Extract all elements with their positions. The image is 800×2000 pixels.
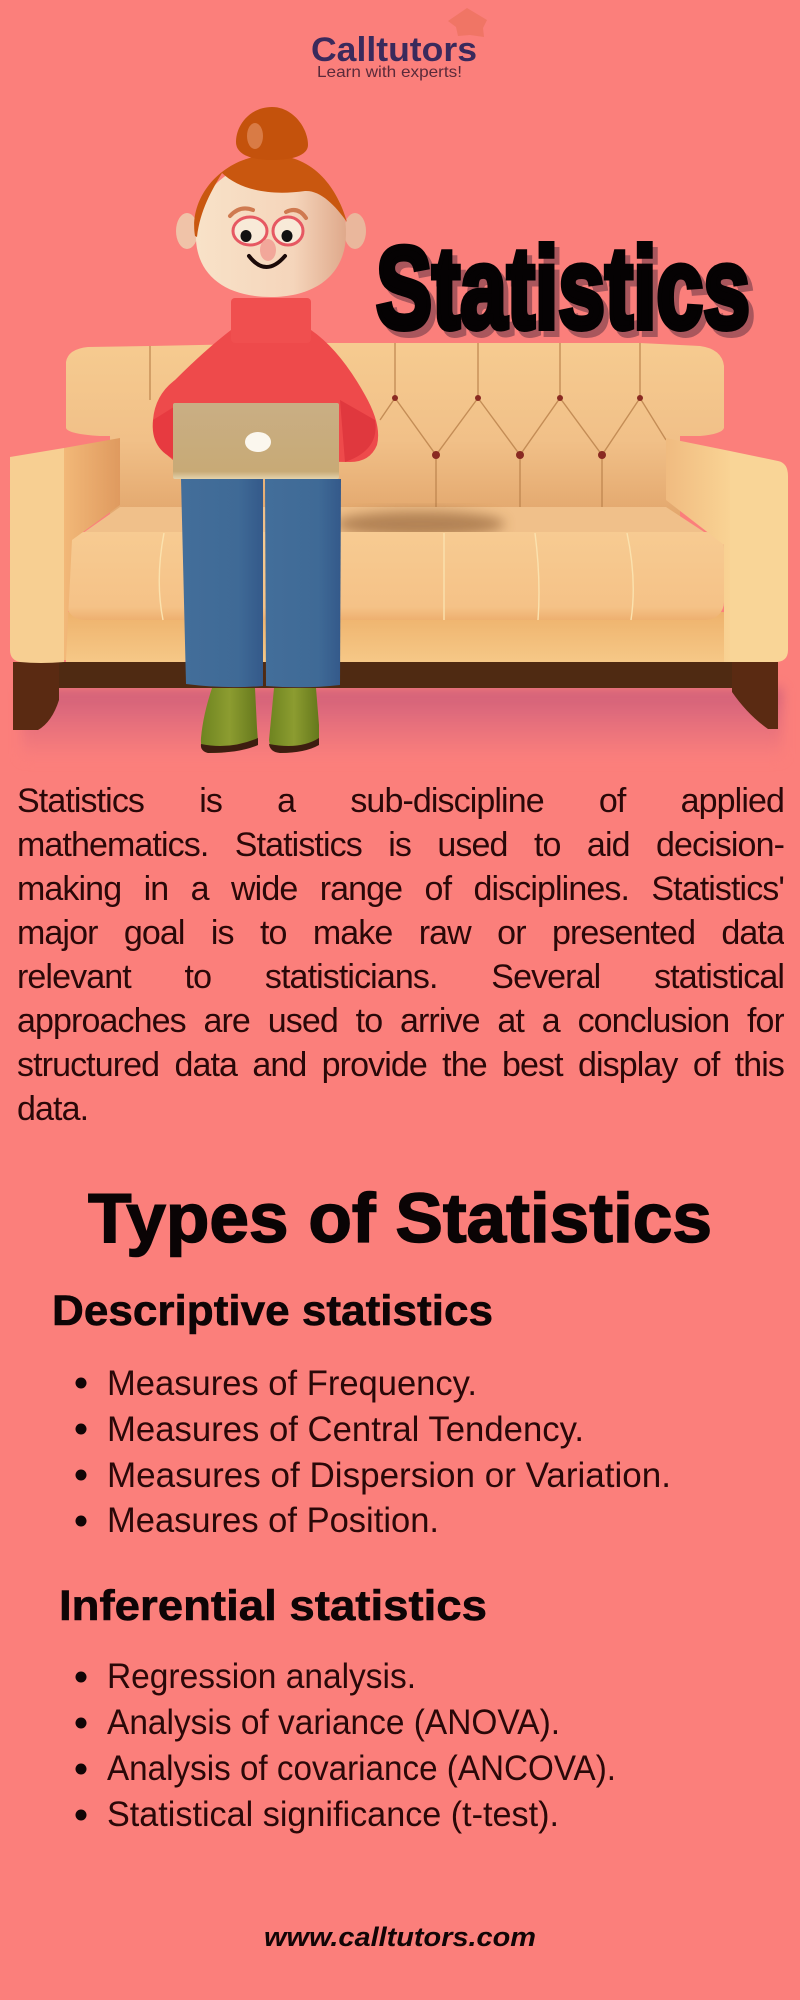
bullet list: Regression analysis. xyxy=(107,1657,416,1696)
icon: graduation cap xyxy=(448,8,487,37)
intro paragraph: major goal is to make raw or presented data xyxy=(17,914,784,952)
subheading: Inferential statistics xyxy=(59,1582,487,1630)
intro paragraph: data. xyxy=(17,1090,88,1128)
cushion seams xyxy=(159,533,633,620)
bullet list: Analysis of variance (ANOVA). xyxy=(107,1703,560,1742)
intro paragraph: Statistics is a sub-discipline of applied xyxy=(17,782,784,820)
footer URL: www.calltutors.com xyxy=(264,1922,536,1952)
ears xyxy=(176,213,198,249)
section: Inferential statistics xyxy=(59,1582,616,1834)
tufted buttons xyxy=(392,395,643,459)
logo tagline: Learn with experts! xyxy=(317,64,462,81)
intro paragraph xyxy=(17,782,784,1128)
jeans xyxy=(181,479,341,687)
subheading: Descriptive statistics xyxy=(52,1287,493,1335)
laptop logo dot xyxy=(245,432,271,452)
seat top xyxy=(66,507,724,570)
intro paragraph: relevant to statisticians. Several statistical xyxy=(17,958,784,996)
intro paragraph: approaches are used to arrive at a conclusion for xyxy=(17,1002,784,1040)
intro paragraph: structured data and provide the best display of this xyxy=(17,1046,784,1084)
laptop xyxy=(173,403,339,479)
logo wordmark: Calltutors xyxy=(311,31,477,69)
sofa back xyxy=(66,343,724,520)
left arm xyxy=(10,438,120,663)
floor shadow xyxy=(22,688,782,758)
illustration: character xyxy=(153,107,378,753)
hair bun xyxy=(236,107,308,160)
bullet list xyxy=(76,1657,616,1834)
glasses and eyes xyxy=(233,217,303,245)
upholstery seams xyxy=(150,343,666,507)
seat shadow xyxy=(335,511,505,537)
bullet list: Measures of Central Tendency. xyxy=(107,1410,584,1449)
bullet list: Measures of Position. xyxy=(107,1501,439,1540)
bullet list: Analysis of covariance (ANCOVA). xyxy=(107,1749,616,1788)
seat cushion xyxy=(66,532,724,620)
intro paragraph: mathematics. Statistics is used to aid decision- xyxy=(17,826,784,864)
bullet list: Statistical significance (t-test). xyxy=(107,1795,559,1834)
logo: Calltutors xyxy=(311,8,487,81)
section: Descriptive statistics xyxy=(52,1287,671,1540)
face xyxy=(196,163,346,297)
heading: Types of Statistics: Types of Statistics xyxy=(88,1179,712,1257)
sofa legs and rail xyxy=(13,662,778,730)
bullet list: Measures of Frequency. xyxy=(107,1364,477,1403)
sweater xyxy=(153,298,378,462)
hair xyxy=(194,155,347,237)
illustration: sofa xyxy=(10,343,788,758)
right arm xyxy=(666,438,788,662)
intro paragraph: making in a wide range of disciplines. Statistics' xyxy=(17,870,784,908)
sofa base xyxy=(66,612,736,662)
bullet list: Measures of Dispersion or Variation. xyxy=(107,1456,671,1495)
boots xyxy=(201,688,319,753)
smile xyxy=(249,256,285,267)
nose xyxy=(260,239,276,261)
bun highlight xyxy=(247,123,263,149)
bullet list xyxy=(76,1364,671,1540)
eyebrows xyxy=(230,208,306,218)
head xyxy=(176,107,366,297)
